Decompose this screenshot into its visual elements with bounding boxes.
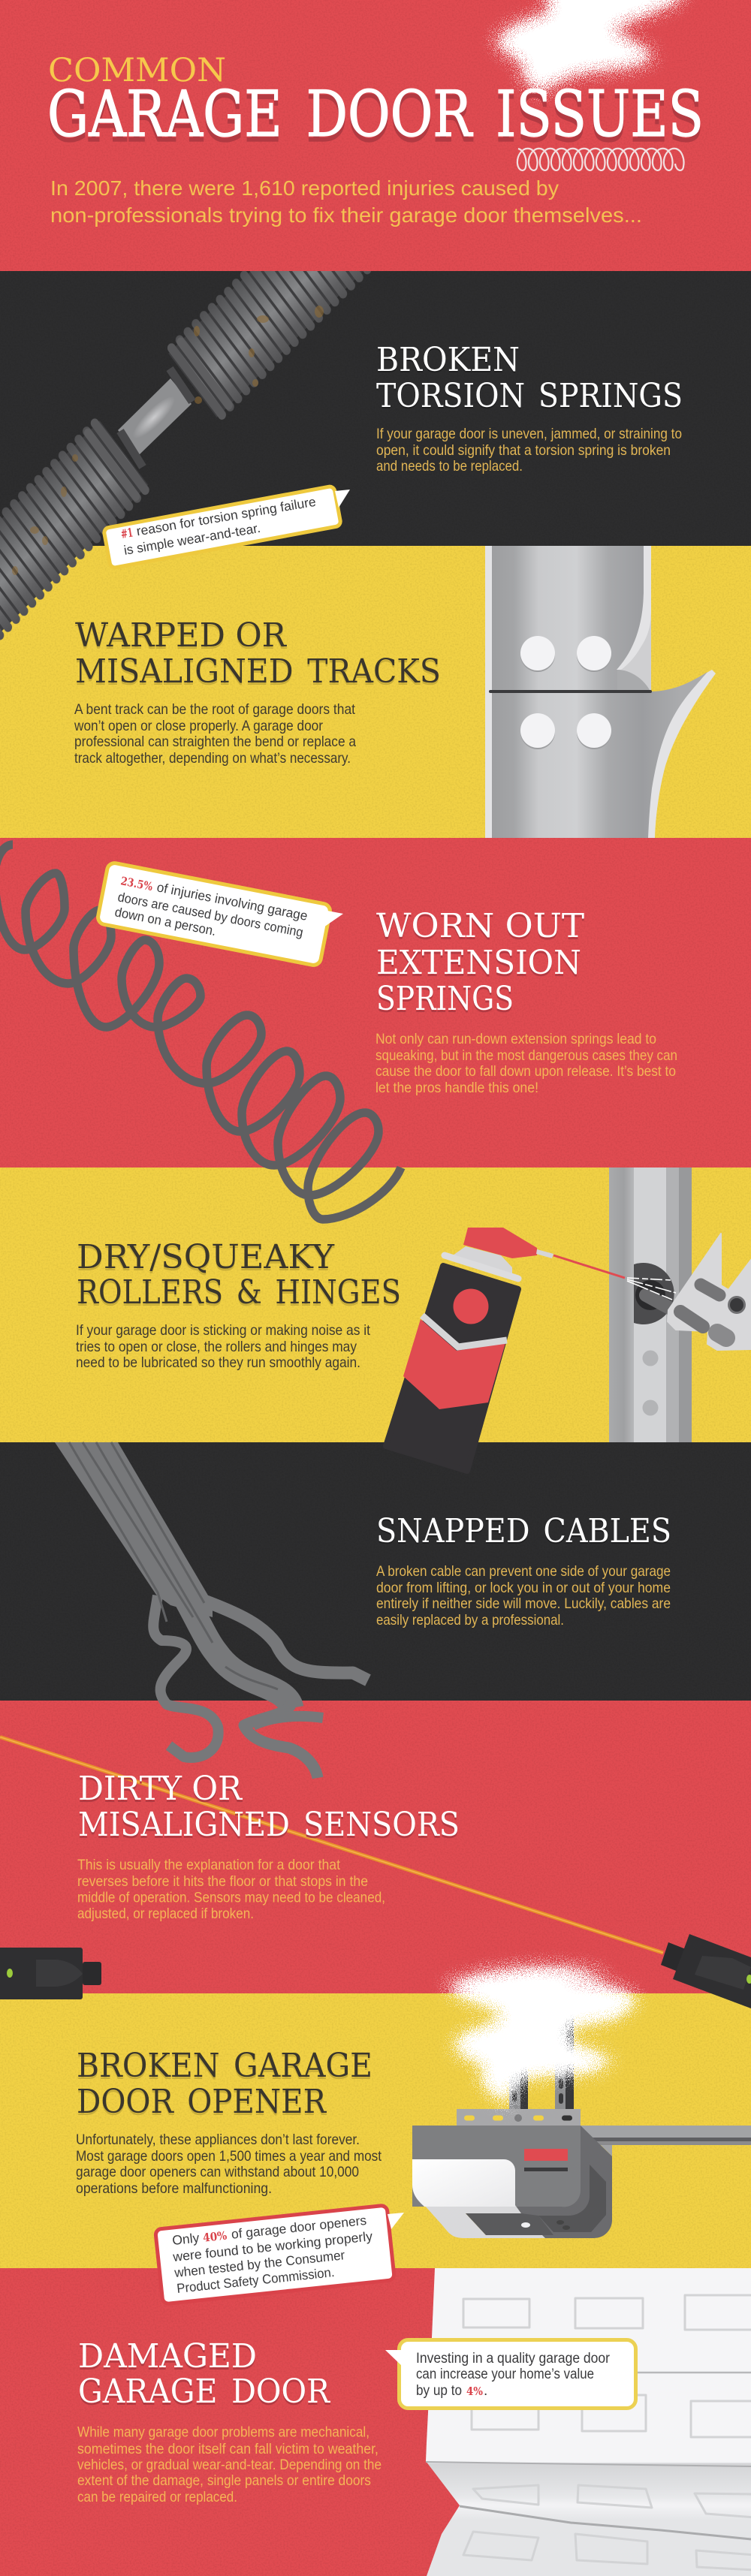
text: damaged door description bbox=[77, 2424, 382, 2505]
text: squeaky rollers description: need to be lubricated so they run smoothly again. bbox=[76, 1354, 360, 1371]
heading: warped tracks bbox=[75, 616, 441, 691]
callout: forty percent of openers: when tested by the Consumer bbox=[173, 2247, 345, 2280]
heading: damaged door: GARAGE DOOR bbox=[78, 2373, 331, 2411]
callout: forty percent of openers: 40% bbox=[202, 2228, 228, 2245]
text: opener description: Unfortunately, these appliances don’t last forever. bbox=[76, 2132, 360, 2148]
callout: home value increase: 4% bbox=[466, 2385, 483, 2398]
callout: home value increase: Investing in a quality garage door bbox=[416, 2351, 611, 2367]
heading: squeaky rollers: DRY/SQUEAKY bbox=[77, 1238, 335, 1276]
text: warped tracks description: won’t open or close properly. A garage door bbox=[74, 718, 323, 734]
text: damaged door description: While many garage door problems are mechanical, bbox=[77, 2424, 369, 2440]
text: torsion springs description: open, it could signify that a torsion spring is broken bbox=[376, 442, 671, 459]
panel: opener background bbox=[0, 1993, 751, 2268]
icon: lubricant spray can bbox=[386, 1228, 625, 1471]
text: snapped cables description bbox=[376, 1563, 671, 1628]
heading: squeaky rollers: ROLLERS & HINGES bbox=[77, 1273, 401, 1312]
text: squeaky rollers description: tries to open or close, the rollers and hinges may bbox=[76, 1339, 357, 1355]
callout: injuries statistic bbox=[97, 862, 343, 966]
panel: warped tracks background bbox=[0, 546, 751, 838]
text: damaged door description: extent of the damage, single panels or entire doors bbox=[77, 2472, 371, 2489]
icon: coiled spring squiggle bbox=[517, 149, 684, 170]
callout: number one reason: #1 bbox=[120, 526, 134, 541]
icon: right sensor bbox=[661, 1934, 751, 2008]
panel: extension springs background bbox=[0, 838, 751, 1167]
heading: damaged door: DAMAGED bbox=[78, 2337, 257, 2376]
text: squeaky rollers description: If your garage door is sticking or making noise as it bbox=[76, 1322, 371, 1339]
icon: sensor laser beam bbox=[0, 1737, 663, 1953]
icon: left sensor bbox=[0, 1948, 101, 1999]
text: sensors description bbox=[77, 1857, 385, 1922]
heading: snapped cables: SNAPPED CABLES bbox=[376, 1512, 671, 1550]
text: snapped cables description: entirely if neither side will move. Luckily, cables are bbox=[376, 1595, 671, 1612]
callout: injuries statistic: doors are caused by doors coming bbox=[116, 889, 304, 940]
icon: torsion spring lower piece bbox=[0, 414, 154, 694]
heading: broken torsion springs bbox=[376, 341, 683, 415]
heading: extension springs: WORN OUT bbox=[376, 907, 584, 945]
panel: header background bbox=[0, 0, 751, 271]
icon: frayed snapped cable bbox=[55, 1442, 368, 1778]
intro text: non-professionals trying to fix their garage door themselves... bbox=[50, 203, 642, 227]
heading: opener bbox=[77, 2047, 372, 2121]
icon: damaged garage door bbox=[426, 2268, 751, 2576]
heading: warped tracks: MISALIGNED TRACKS bbox=[75, 652, 441, 691]
text: snapped cables description: A broken cable can prevent one side of your garage bbox=[376, 1563, 671, 1580]
icon: garage track with hinge and roller bbox=[609, 1167, 751, 1442]
intro text: In 2007, there were 1,610 reported injuries caused by bbox=[50, 176, 559, 200]
text: sensors description: reverses before it hits the floor or that stops in the bbox=[77, 1873, 368, 1890]
heading: warped tracks: WARPED OR bbox=[75, 616, 288, 655]
text: torsion springs description: and needs to be replaced. bbox=[376, 458, 523, 475]
text: opener description: Most garage doors open 1,500 times a year and most bbox=[76, 2148, 382, 2165]
panel: broken torsion springs background bbox=[0, 271, 751, 546]
text: warped tracks description: professional can straighten the bend or replace a bbox=[74, 734, 356, 750]
callout: home value increase: can increase your home’s value bbox=[416, 2367, 594, 2382]
text: torsion springs description bbox=[376, 426, 682, 475]
heading: opener: BROKEN GARAGE bbox=[77, 2047, 372, 2085]
text: damaged door description: sometimes the door itself can fall victim to weather, bbox=[77, 2441, 379, 2457]
callout: number one reason: is simple wear-and-tear. bbox=[122, 520, 261, 558]
panel: damaged door background bbox=[0, 2268, 751, 2576]
callout: forty percent of openers bbox=[155, 2205, 404, 2304]
icon: garage door opener with mounting brackets bbox=[412, 1993, 751, 2238]
text: extension springs description: cause the door to fall down upon release. It’s best to bbox=[376, 1063, 676, 1080]
callout: injuries statistic: 23.5% bbox=[119, 874, 154, 893]
panel: snapped cables background bbox=[0, 1442, 751, 1701]
icon: bent garage door track bbox=[485, 546, 716, 838]
callout: number one reason bbox=[104, 486, 350, 568]
heading: extension springs: SPRINGS bbox=[376, 980, 514, 1018]
heading: broken torsion springs: BROKEN bbox=[376, 341, 520, 379]
text: sensors description: adjusted, or replaced if broken. bbox=[77, 1906, 254, 1922]
callout: forty percent of openers: of garage door openers bbox=[231, 2213, 367, 2242]
text: extension springs description: squeaking, but in the most dangerous cases they can bbox=[376, 1047, 677, 1064]
text: torsion springs description: If your garage door is uneven, jammed, or straining to bbox=[376, 426, 682, 442]
text: damaged door description: vehicles, or gradual wear-and-tear. Depending on the bbox=[77, 2457, 382, 2473]
icon: smoke over opener bbox=[445, 1967, 638, 2107]
icon: extension spring bbox=[0, 845, 401, 1219]
text: snapped cables description: easily replaced by a professional. bbox=[376, 1612, 564, 1628]
heading: extension springs: EXTENSION bbox=[376, 944, 581, 982]
heading: extension springs bbox=[376, 907, 584, 1018]
heading: sensors: DIRTY OR bbox=[78, 1770, 243, 1808]
text: warped tracks description: track altogether, depending on what’s necessary. bbox=[74, 750, 351, 767]
title: COMMON bbox=[48, 52, 226, 89]
callout: home value increase: by up to bbox=[416, 2383, 462, 2399]
heading: sensors bbox=[78, 1770, 460, 1844]
text: sensors description: This is usually the explanation for a door that bbox=[77, 1857, 341, 1873]
icon: exposed shaft between spring pieces bbox=[118, 369, 192, 467]
text: extension springs description: Not only can run-down extension springs lead to bbox=[376, 1031, 656, 1047]
text: opener description bbox=[76, 2132, 382, 2197]
text: sensors description: middle of operation. Sensors may need to be cleaned, bbox=[77, 1889, 385, 1906]
heading: sensors: MISALIGNED SENSORS bbox=[78, 1806, 460, 1844]
icon: smoke over title bbox=[496, 0, 687, 94]
text: extension springs description: let the pros handle this one! bbox=[376, 1080, 538, 1096]
text: snapped cables description: door from lifting, or lock you in or out of your home bbox=[376, 1580, 671, 1596]
callout: home value increase bbox=[385, 2339, 635, 2409]
panel: squeaky rollers background bbox=[0, 1167, 751, 1442]
heading: broken torsion springs: TORSION SPRINGS bbox=[376, 377, 683, 415]
heading: squeaky rollers bbox=[77, 1238, 401, 1312]
text: opener description: operations before malfunctioning. bbox=[76, 2180, 272, 2197]
panel: sensors background bbox=[0, 1701, 751, 1993]
callout: injuries statistic: down on a person. bbox=[113, 904, 218, 939]
callout: injuries statistic: of injuries involving garage bbox=[155, 879, 309, 923]
callout: forty percent of openers: Only bbox=[171, 2230, 200, 2248]
heading: damaged door bbox=[78, 2337, 331, 2411]
callout: forty percent of openers: Product Safety Commission. bbox=[176, 2264, 335, 2296]
text: warped tracks description bbox=[74, 701, 356, 767]
text: warped tracks description: A bent track can be the root of garage doors that bbox=[74, 701, 356, 718]
text: squeaky rollers description bbox=[76, 1322, 371, 1371]
icon: torsion spring upper piece bbox=[167, 271, 371, 420]
callout: number one reason: reason for torsion spring failure bbox=[135, 494, 317, 538]
callout: home value increase: . bbox=[484, 2383, 487, 2399]
text: damaged door description: can be repaired or replaced. bbox=[77, 2489, 237, 2505]
intro text bbox=[50, 176, 642, 227]
text: extension springs description bbox=[376, 1031, 677, 1096]
heading: opener: DOOR OPENER bbox=[77, 2083, 327, 2121]
callout: forty percent of openers: were found to be working properly bbox=[171, 2228, 373, 2264]
text: opener description: garage door openers can withstand about 10,000 bbox=[76, 2164, 359, 2180]
